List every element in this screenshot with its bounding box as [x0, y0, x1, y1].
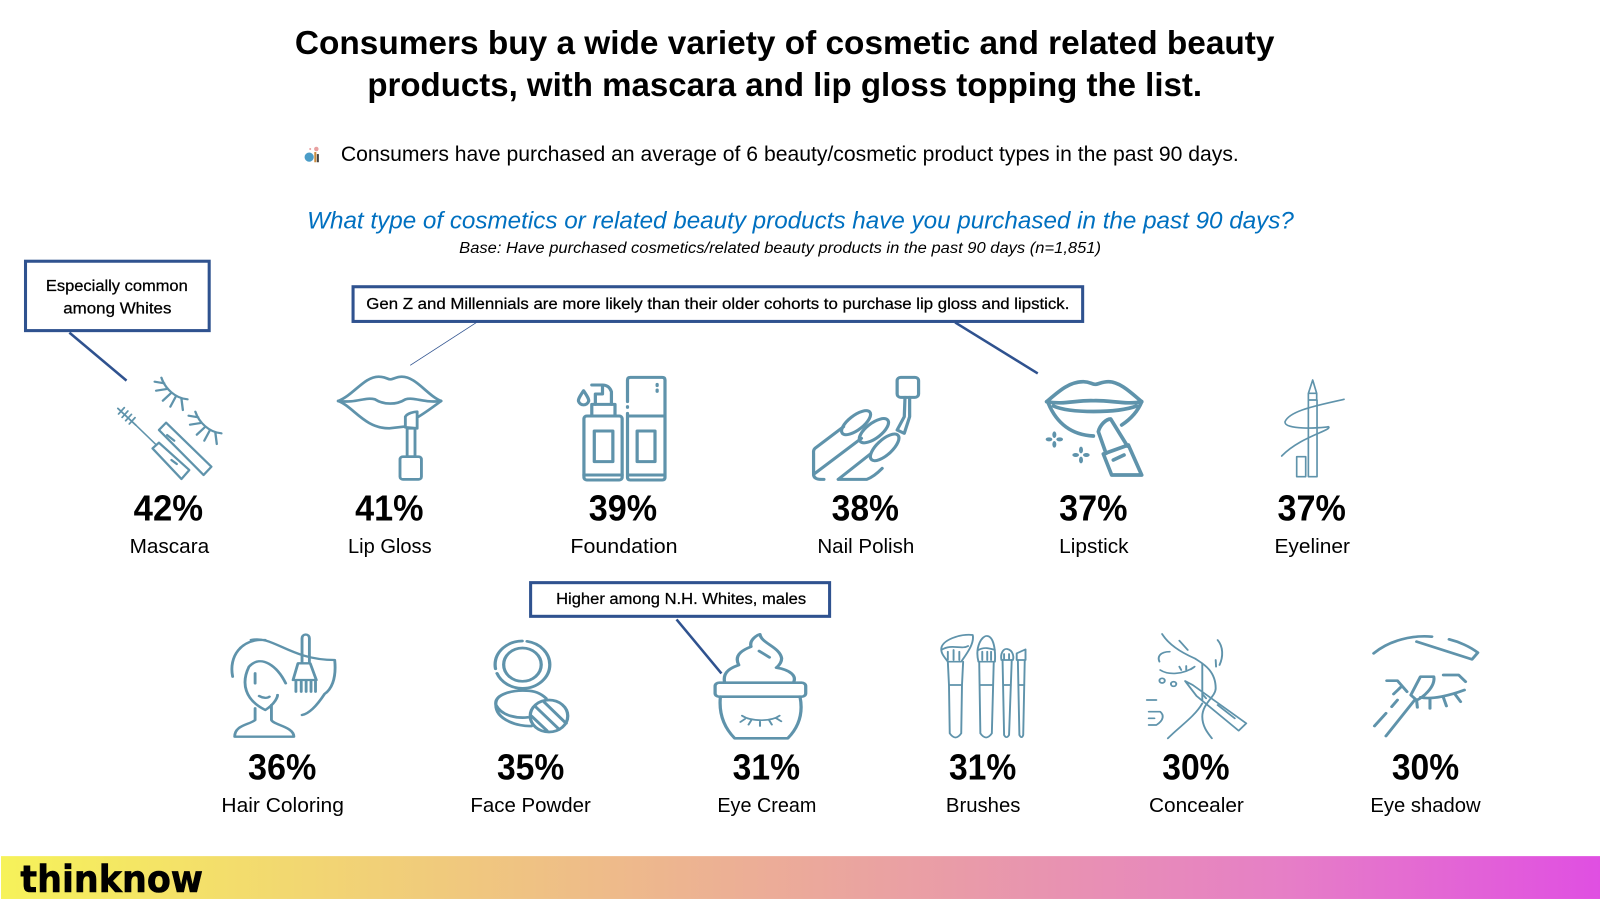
stat: concealer — [1147, 634, 1246, 817]
stat: foundation — [570, 377, 678, 558]
stat: nail polish — [814, 377, 919, 558]
value: 39% — [589, 488, 657, 528]
value: 41% — [355, 488, 423, 528]
value: 30% — [1162, 748, 1230, 788]
label: Concealer — [1149, 795, 1244, 817]
label: Brushes — [946, 795, 1020, 817]
label: Eye shadow — [1370, 795, 1481, 817]
icon: mascara — [118, 378, 221, 479]
label: Foundation — [570, 536, 678, 558]
icon: concealer — [1147, 634, 1246, 738]
stat: eye shadow — [1370, 636, 1481, 817]
icon: eye shadow — [1374, 636, 1478, 736]
stat: face powder — [470, 641, 591, 817]
key finding text: Consumers have purchased an average of 6 beauty/cosmetic product types in the past 90 days. — [341, 142, 1239, 166]
icon: brushes — [941, 635, 1026, 738]
label: Hair Coloring — [221, 795, 344, 817]
stat: brushes — [941, 635, 1026, 817]
title: products, with mascara and lip gloss topping the list. — [367, 67, 1202, 104]
icon: foundation — [578, 377, 665, 480]
callout: gen z and millennials — [353, 287, 1083, 373]
label: Face Powder — [470, 795, 591, 817]
icon: lipstick — [1046, 382, 1142, 475]
value: 38% — [832, 488, 899, 528]
stat: lipstick — [1046, 382, 1142, 558]
value: 42% — [134, 488, 203, 528]
value: 36% — [248, 748, 316, 788]
value: 30% — [1392, 748, 1459, 788]
callout: especially common among whites: Especially common — [46, 278, 188, 295]
label: Mascara — [130, 536, 210, 558]
label: Eye Cream — [717, 795, 816, 817]
callout: gen z and millennials: Gen Z and Millennials are more likely than their older cohorts to purchase lip gloss and lipstick. — [366, 296, 1069, 313]
stat: lip gloss — [338, 377, 441, 558]
title: Consumers buy a wide variety of cosmetic and related beauty — [295, 25, 1275, 62]
base note: Base: Have purchased cosmetics/related beauty products in the past 90 days (n=1,851) — [459, 240, 1101, 257]
question heading: What type of cosmetics or related beauty products have you purchased in the past 90 days? — [307, 208, 1294, 235]
stat: eye cream — [715, 634, 816, 817]
icon: nail polish — [814, 377, 919, 479]
value: 35% — [497, 748, 564, 788]
callout: especially common among whites — [26, 261, 209, 381]
label: Lip Gloss — [348, 536, 432, 558]
value: 37% — [1278, 488, 1346, 528]
value: 31% — [949, 748, 1016, 788]
icon: hair coloring — [232, 635, 335, 737]
title — [295, 25, 1275, 104]
value: 37% — [1059, 488, 1128, 528]
value: 31% — [733, 748, 800, 788]
icon: face powder — [495, 641, 568, 732]
callout: higher among n.h. whites, males: Higher among N.H. Whites, males — [556, 591, 806, 608]
logo: thinknow: thinknow — [20, 857, 203, 900]
stat: mascara — [118, 378, 221, 558]
label: Nail Polish — [817, 536, 914, 558]
stat: eyeliner — [1274, 380, 1350, 558]
icon: eyeliner — [1282, 380, 1344, 477]
label: Lipstick — [1059, 536, 1129, 558]
footer bar — [1, 856, 1600, 900]
stat: hair coloring — [221, 635, 344, 817]
icon: eye cream — [715, 634, 806, 738]
icon: lip gloss — [338, 377, 441, 479]
callout: especially common among whites: among Whites — [63, 300, 172, 317]
callout: higher among n.h. whites, males — [531, 583, 830, 673]
icon: cosmetics emoji — [305, 147, 319, 162]
label: Eyeliner — [1274, 536, 1350, 558]
